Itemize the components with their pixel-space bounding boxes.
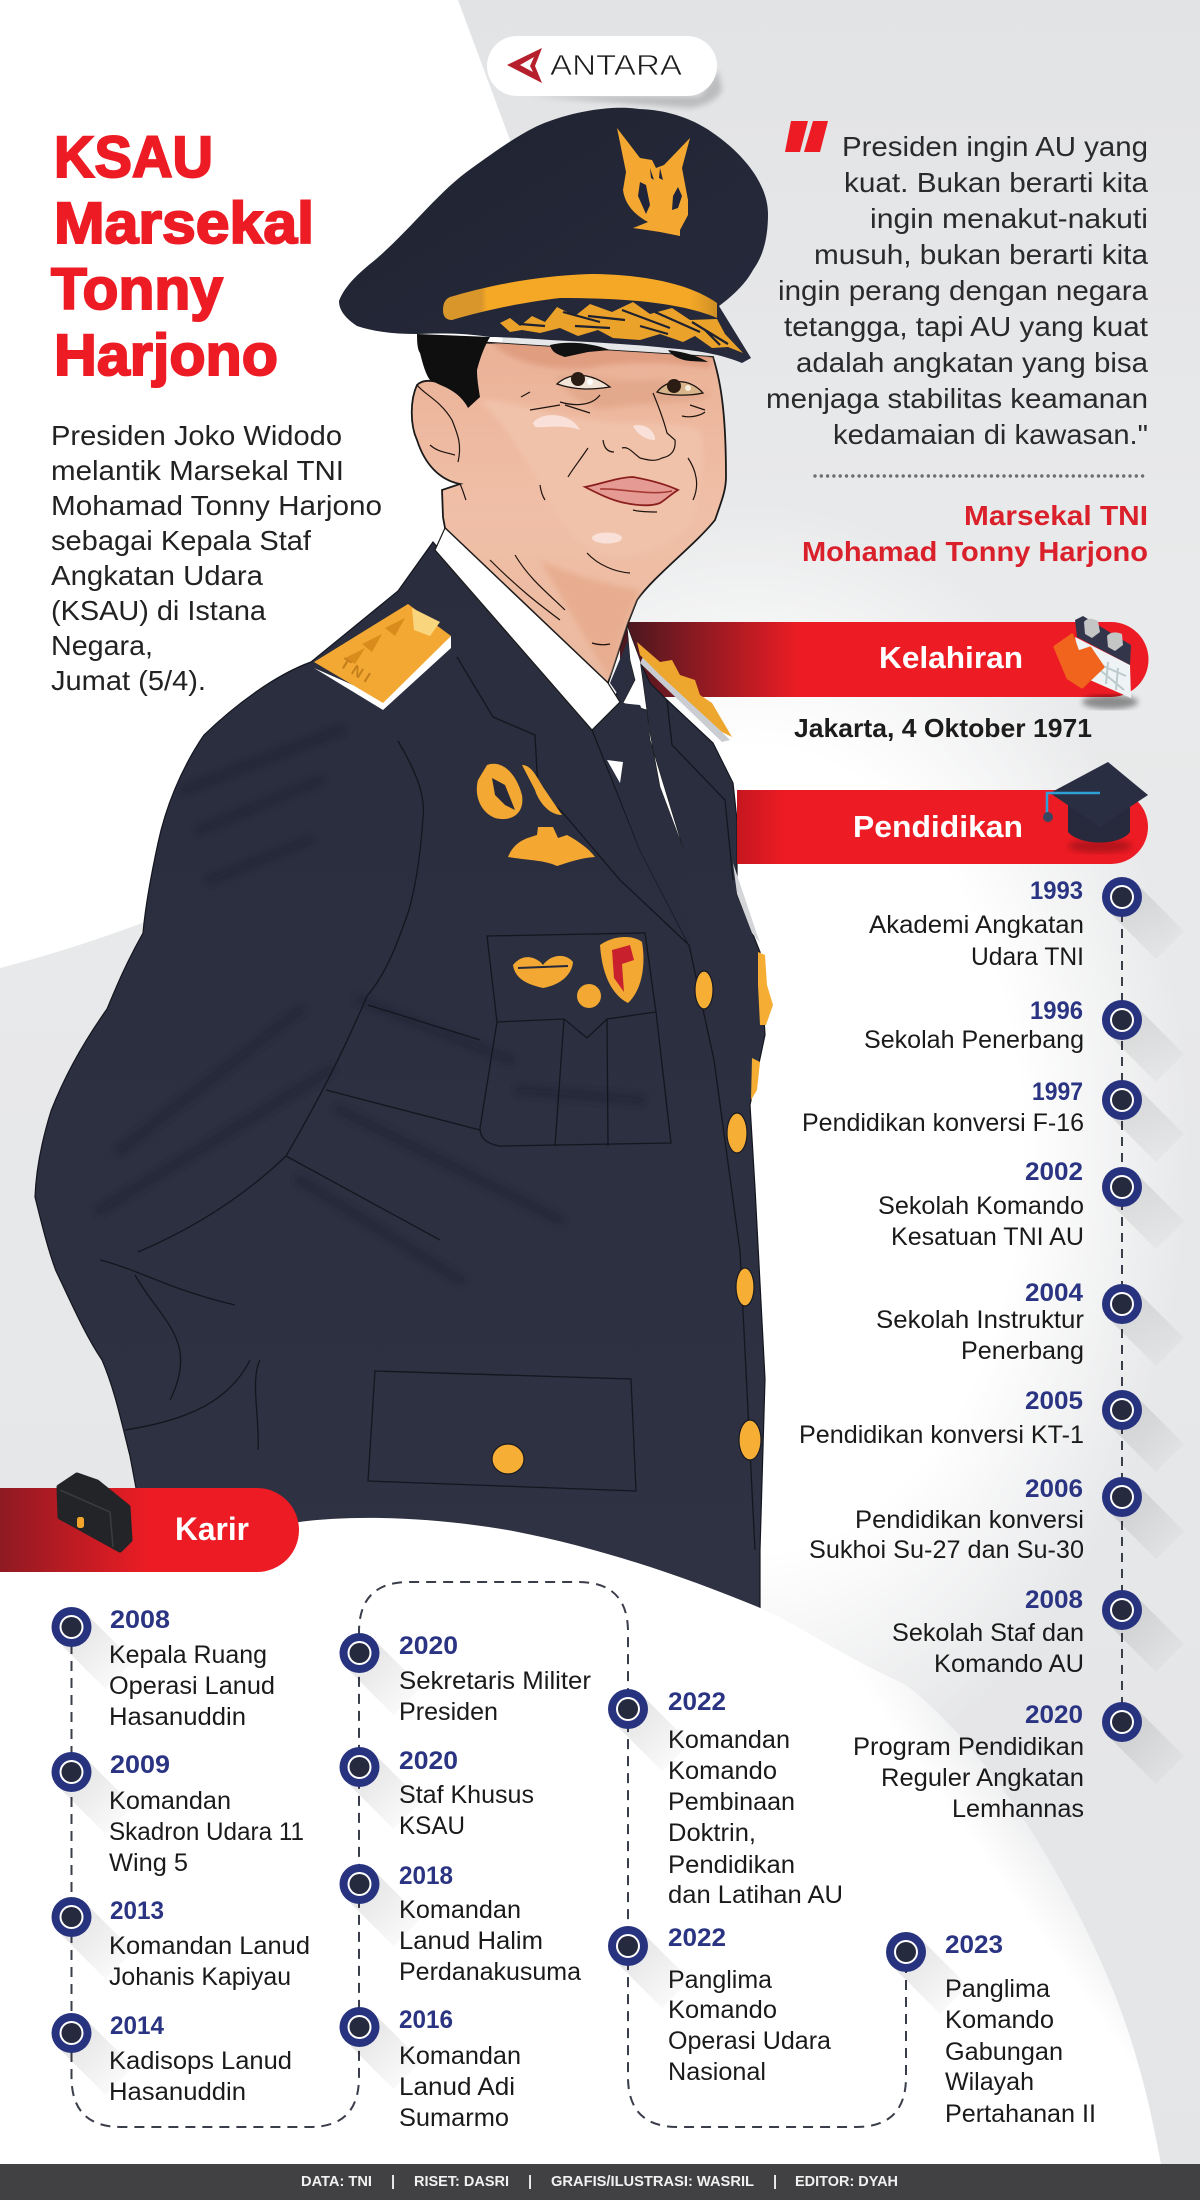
footer bar: | [391, 2174, 395, 2190]
education: 2002: Sekolah Komando [878, 1192, 1084, 1220]
cap brim embroidery [500, 302, 743, 353]
education: 2020: Reguler Angkatan [881, 1764, 1084, 1792]
career: 2022 Komandan: Komando [668, 1757, 777, 1785]
embroidery dark detail [520, 310, 728, 345]
icon: graduation cap [1043, 762, 1148, 853]
career: 2018: Perdanakusuma [399, 1958, 581, 1986]
ear, face and neck skin [412, 340, 726, 683]
career: 2008 [109, 1606, 275, 1731]
education: 2008 [892, 1586, 1084, 1678]
career: 2023: Panglima [945, 1975, 1050, 2003]
face highlights [533, 415, 655, 544]
quote text: kedamaian di kawasan." [833, 419, 1148, 450]
career: 2016: Lanud Adi [399, 2073, 515, 2101]
career: 2020 Staf: KSAU [399, 1812, 465, 1840]
background: bottom white curve [0, 1518, 1162, 2170]
education: 2006: 2006 [1025, 1475, 1083, 1503]
education: 1993 [869, 877, 1084, 971]
education dots [1102, 877, 1184, 1784]
career: 2020 Sekretaris: 2020 [399, 1632, 458, 1660]
career: 2014: Kadisops Lanud [109, 2047, 292, 2075]
pocket medals [513, 937, 643, 1008]
birth text: Jakarta, 4 Oktober 1971 [794, 713, 1092, 743]
footer bar: EDITOR: DYAH [795, 2174, 898, 2190]
quote text [766, 131, 1148, 450]
footer bar: GRAFIS/ILUSTRASI: WASRIL [551, 2174, 754, 2190]
buttons [492, 971, 761, 1474]
icon: briefcase [59, 1475, 130, 1550]
ribbon: Pendidikan: Pendidikan [853, 809, 1023, 844]
title: Harjono [54, 323, 278, 388]
education: 1996: Sekolah Penerbang [864, 1026, 1084, 1054]
career: 2022 Komandan [668, 1688, 843, 1909]
right epaulette [637, 642, 732, 742]
career: 2022 Panglima: Komando [668, 1996, 777, 2024]
face lines [417, 385, 705, 645]
career: 2009 [109, 1751, 304, 1877]
quote attribution [802, 500, 1148, 567]
career: 2023: Wilayah [945, 2068, 1034, 2096]
brows and eyes [550, 343, 708, 395]
jacket seams and pockets [100, 657, 755, 1550]
education: 2004 [876, 1279, 1084, 1365]
logo pill [487, 36, 722, 108]
career: 2016 [399, 2006, 521, 2132]
education: 2006 [809, 1475, 1084, 1564]
quote text: menjaga stabilitas keamanan [766, 383, 1148, 414]
collar [435, 528, 620, 730]
quote text: musuh, bukan berarti kita [814, 239, 1148, 270]
career: 2014: Hasanuddin [109, 2078, 246, 2106]
chest badges [477, 764, 595, 866]
left epaulette [314, 604, 451, 710]
intro paragraph: Negara, [51, 630, 153, 661]
education: 2005: Pendidikan konversi KT-1 [799, 1421, 1084, 1449]
education: 1997: 1997 [1032, 1078, 1083, 1106]
intro paragraph: Mohamad Tonny Harjono [51, 490, 382, 521]
career timeline line [72, 1582, 906, 2127]
ribbon: Karir: Karir [175, 1511, 249, 1547]
cap crown [339, 108, 768, 363]
cap emblem [617, 128, 690, 236]
career: 2008: Hasanuddin [109, 1703, 246, 1731]
career: 2013: Komandan Lanud [109, 1932, 310, 1960]
career: 2020 Staf [399, 1747, 534, 1840]
shirt inner shadow [610, 640, 630, 693]
logo mark [507, 48, 542, 83]
intro paragraph: sebagai Kepala Staf [51, 525, 311, 556]
cap gold band [443, 274, 717, 320]
side gold trims [751, 952, 773, 1100]
intro paragraph: melantik Marsekal TNI [51, 455, 344, 486]
education: 2004: Sekolah Instruktur [876, 1306, 1084, 1334]
quote text: tetangga, tapi AU yang kuat [784, 311, 1148, 342]
career: 2022 Panglima: Operasi Udara [668, 2027, 831, 2055]
career: 2014: 2014 [110, 2012, 164, 2040]
education: 2002: 2002 [1025, 1158, 1083, 1186]
career: 2020 Sekretaris: Presiden [399, 1698, 498, 1726]
title: KSAU [54, 125, 213, 190]
quote text: ingin perang dengan negara [778, 275, 1148, 306]
career: 2008: 2008 [110, 1606, 170, 1634]
career: 2018: Lanud Halim [399, 1927, 543, 1955]
career: 2020 Sekretaris: Sekretaris Militer [399, 1667, 591, 1695]
education: 2020: Program Pendidikan [853, 1733, 1084, 1761]
education: 2020: 2020 [1025, 1701, 1083, 1729]
shirt front [623, 625, 683, 848]
career: 2022 Komandan: Doktrin, [668, 1819, 756, 1847]
shirt sliver at hem [733, 863, 760, 943]
education: 2008: 2008 [1025, 1586, 1083, 1614]
figure: officer portrait [35, 108, 773, 1640]
career: 2008: Kepala Ruang [109, 1641, 267, 1669]
education: 2020 [853, 1701, 1084, 1823]
footer bar: RISET: DASRI [414, 2174, 509, 2190]
education: 1997 [802, 1078, 1084, 1137]
icon: calendar [1055, 616, 1138, 709]
quote mark [785, 121, 828, 152]
jacket [35, 542, 765, 1640]
jacket shading [100, 830, 639, 1280]
ribbon: Kelahiran [620, 616, 1148, 709]
education: 1996 [864, 997, 1084, 1054]
ribbon: Pendidikan [737, 762, 1148, 864]
quote attribution: Mohamad Tonny Harjono [802, 536, 1148, 567]
career: 2009: Komandan [109, 1787, 231, 1815]
career: 2020 Staf: Staf Khusus [399, 1781, 534, 1809]
career: 2016: Komandan [399, 2042, 521, 2070]
quote text: Presiden ingin AU yang [842, 131, 1148, 162]
education timeline line [1121, 897, 1123, 1722]
career: 2009: Skadron Udara 11 [109, 1818, 304, 1846]
intro paragraph: Presiden Joko Widodo [51, 420, 342, 451]
intro paragraph: Angkatan Udara [51, 560, 263, 591]
education: 2002: Kesatuan TNI AU [891, 1223, 1084, 1251]
career: 2023 [945, 1931, 1096, 2128]
face shading [480, 338, 713, 680]
quote text: adalah angkatan yang bisa [796, 347, 1148, 378]
career: 2022 Komandan: Pembinaan [668, 1788, 795, 1816]
footer bar [0, 2164, 1200, 2200]
footer bar: | [773, 2174, 777, 2190]
education: 1993: Udara TNI [971, 943, 1084, 971]
career: 2009: 2009 [110, 1751, 170, 1779]
ribbon: Kelahiran: Kelahiran [879, 640, 1023, 675]
hair [417, 334, 490, 408]
career: 2009: Wing 5 [109, 1849, 188, 1877]
education: 1996: 1996 [1030, 997, 1083, 1025]
intro paragraph: Jumat (5/4). [51, 665, 206, 696]
education: 2005: 2005 [1025, 1387, 1083, 1415]
education: 2020: Lemhannas [952, 1795, 1084, 1823]
career: 2022 Komandan: 2022 [668, 1688, 726, 1716]
quote text: kuat. Bukan berarti kita [844, 167, 1148, 198]
education: 1993: Akademi Angkatan [869, 911, 1084, 939]
career: 2016: Sumarmo [399, 2104, 509, 2132]
education: 1993: 1993 [1030, 877, 1083, 905]
intro paragraph [51, 420, 382, 696]
lip parting line [600, 489, 672, 493]
quote attribution: Marsekal TNI [964, 500, 1148, 531]
education: 2006: Sukhoi Su-27 dan Su-30 [809, 1536, 1084, 1564]
education: 2008: Komando AU [934, 1650, 1084, 1678]
quote text: ingin menakut-nakuti [870, 203, 1148, 234]
left epaulette: TNI [337, 655, 377, 689]
career dots [52, 1607, 968, 2095]
career: 2008: Operasi Lanud [109, 1672, 275, 1700]
career: 2020 Sekretaris [399, 1632, 591, 1726]
career: 2020 Staf: 2020 [399, 1747, 458, 1775]
lips [585, 477, 678, 505]
title: Tonny [51, 257, 223, 322]
education: 2005 [799, 1387, 1084, 1449]
career: 2023: 2023 [945, 1931, 1003, 1959]
career: 2013: Johanis Kapiyau [109, 1963, 291, 1991]
tie white triangle [607, 760, 623, 783]
career: 2018: 2018 [399, 1862, 453, 1890]
intro paragraph: (KSAU) di Istana [51, 595, 266, 626]
title [51, 125, 314, 388]
career: 2023: Gabungan [945, 2038, 1063, 2066]
career: 2014 [109, 2012, 292, 2106]
tie [593, 703, 689, 945]
education: 2008: Sekolah Staf dan [892, 1619, 1084, 1647]
education: 2006: Pendidikan konversi [855, 1506, 1084, 1534]
career: 2023: Pertahanan II [945, 2100, 1096, 2128]
education: 2002 [878, 1158, 1084, 1251]
title: Marsekal [54, 191, 314, 256]
footer bar: | [528, 2174, 532, 2190]
career: 2013: 2013 [110, 1897, 164, 1925]
career: 2013 [109, 1897, 310, 1991]
career: 2022 Panglima [668, 1924, 831, 2086]
education: 1997: Pendidikan konversi F-16 [802, 1109, 1084, 1137]
career: 2022 Komandan: Pendidikan [668, 1851, 795, 1879]
footer bar: DATA: TNI [301, 2174, 372, 2190]
education: 2004: 2004 [1025, 1279, 1083, 1307]
career: 2022 Panglima: Nasional [668, 2058, 766, 2086]
career: 2023: Komando [945, 2006, 1054, 2034]
career: 2018: Komandan [399, 1896, 521, 1924]
logo wordmark: ANTARA [550, 50, 683, 82]
career: 2018 [399, 1862, 581, 1986]
career: 2022 Komandan: dan Latihan AU [668, 1881, 843, 1909]
career: 2016: 2016 [399, 2006, 453, 2034]
career: 2022 Panglima: Panglima [668, 1966, 772, 1994]
background: white glow behind education [330, 480, 1200, 1820]
education: 2004: Penerbang [961, 1337, 1084, 1365]
ribbon: Karir [0, 1475, 299, 1572]
career: 2022 Komandan: Komandan [668, 1726, 790, 1754]
career: 2022 Panglima: 2022 [668, 1924, 726, 1952]
